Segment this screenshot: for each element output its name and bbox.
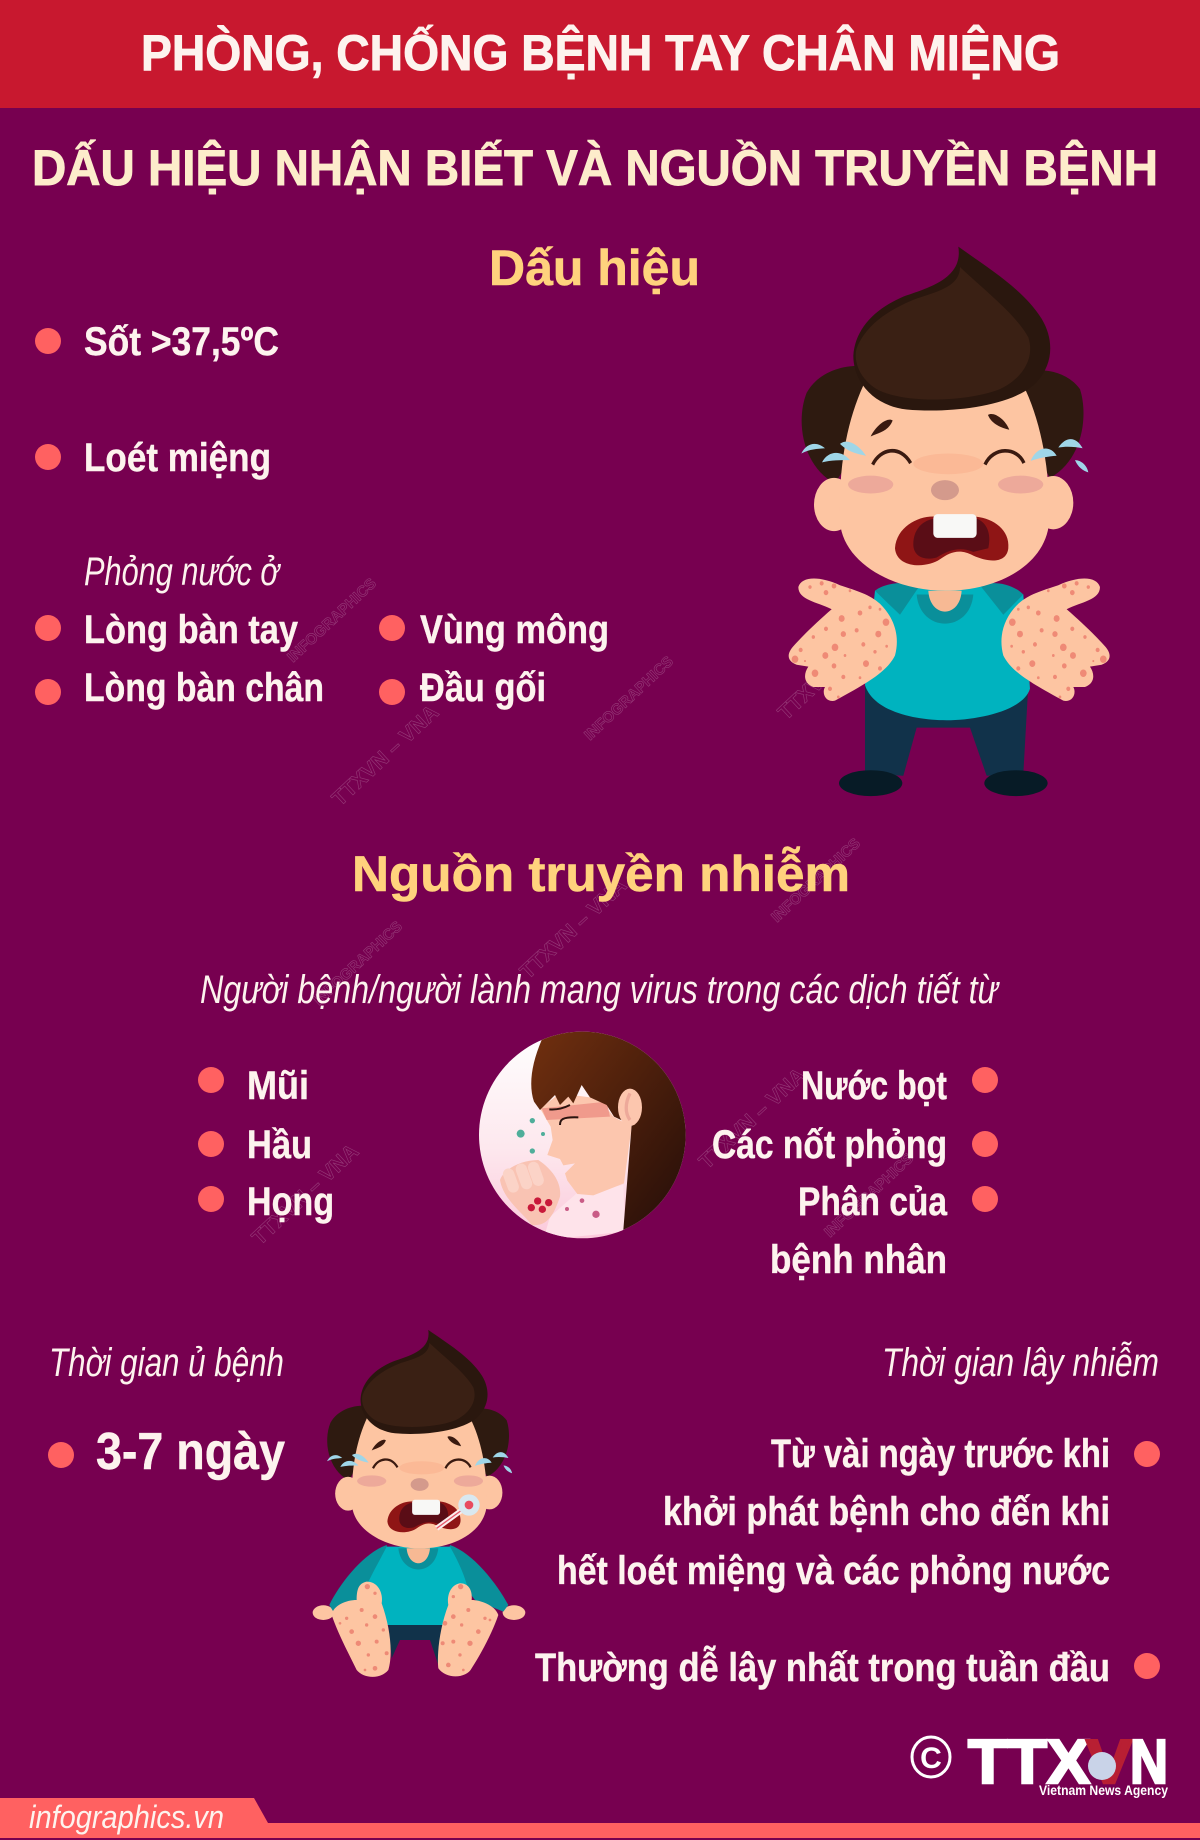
watermarks: TTXVN – VNA	[328, 701, 443, 811]
heading: infection sources: Nguồn truyền nhiễm	[352, 846, 850, 902]
footer tab	[0, 1798, 268, 1838]
source: patient stool	[770, 1180, 998, 1282]
watermarks: INFOGRAPHICS	[768, 835, 864, 926]
watermarks	[248, 575, 917, 1250]
value: 3-7 days: 3-7 ngày	[96, 1423, 285, 1481]
logo: TTXVN: N	[1130, 1728, 1168, 1797]
heading: signs: Dấu hiệu	[489, 240, 700, 296]
text: blisters on: Phỏng nước ở	[84, 550, 281, 594]
text: contagious from before onset: Từ vài ngày trước khi	[771, 1432, 1110, 1476]
source: nose: Mũi	[247, 1064, 309, 1108]
sign: buttocks: Vùng mông	[420, 608, 609, 652]
logo: TTXVN: V	[1086, 1728, 1132, 1797]
icon: sitting boy with thermometer	[313, 1330, 525, 1677]
footer band	[0, 1823, 1200, 1838]
text: contagious from before onset: khởi phát bệnh cho đến khi	[663, 1490, 1110, 1534]
source: saliva: Nước bọt	[801, 1064, 947, 1108]
logo: TTXVN: TTX	[968, 1728, 1090, 1797]
icon: crying boy with rash on hands	[789, 247, 1110, 796]
watermarks: INFOGRAPHICS	[310, 918, 406, 1009]
icon: coughing woman	[479, 1032, 686, 1238]
watermarks: TTXVN – VNA	[695, 1064, 810, 1174]
sign: mouth ulcers: Loét miệng	[84, 436, 271, 480]
watermarks: INFOGRAPHICS	[821, 1150, 917, 1241]
panel: signs	[35, 240, 700, 710]
source: nose	[198, 1064, 309, 1108]
header band	[0, 0, 1200, 108]
panel: incubation period	[48, 1341, 285, 1481]
sign: knees: Đầu gối	[420, 666, 546, 710]
source: throat: Họng	[247, 1180, 334, 1224]
text: most contagious first week: Thường dễ lây nhất trong tuần đầu	[535, 1644, 1110, 1690]
watermarks: TTXVN – VNA	[516, 874, 631, 984]
source: blisters: Các nốt phỏng	[712, 1123, 947, 1167]
logo: TTXVN	[912, 1728, 1168, 1798]
footer site name: infographics.vn	[29, 1799, 224, 1835]
title: PHÒNG, CHỐNG BỆNH TAY CHÂN MIỆNG	[141, 24, 1060, 81]
text: contagious from before onset: hết loét miệng và các phỏng nước	[557, 1549, 1110, 1593]
source: patient stool: Phân của	[798, 1180, 948, 1224]
source: pharynx	[198, 1123, 312, 1167]
panel: contagious period	[535, 1340, 1160, 1690]
watermarks: INFOGRAPHICS	[581, 653, 677, 744]
text: contagious from before onset	[557, 1432, 1160, 1593]
source: patient stool: bệnh nhân	[770, 1238, 947, 1282]
subtitle: DẤU HIỆU NHẬN BIẾT VÀ NGUỒN TRUYỀN BỆNH	[32, 140, 1158, 196]
source: throat	[198, 1180, 334, 1224]
text: carriers intro: Người bệnh/người lành mang virus trong các dịch tiết từ	[200, 968, 1000, 1012]
sign: palms: Lòng bàn tay	[84, 608, 299, 652]
watermarks: TTXVN – VNA	[774, 615, 889, 725]
watermarks: TTXVN – VNA	[248, 1140, 363, 1250]
sign: soles: Lòng bàn chân	[84, 666, 324, 710]
sign: fever: Sốt >37,5ºC	[84, 320, 279, 364]
sign: knees	[379, 666, 546, 710]
logo: TTXVN: Vietnam News Agency	[1039, 1782, 1168, 1798]
label: incubation time: Thời gian ủ bệnh	[49, 1341, 284, 1385]
source: pharynx: Hầu	[247, 1123, 312, 1167]
panel: infection sources	[198, 846, 1000, 1282]
logo: TTXVN: C	[920, 1742, 942, 1775]
watermarks: INFOGRAPHICS	[284, 575, 380, 666]
